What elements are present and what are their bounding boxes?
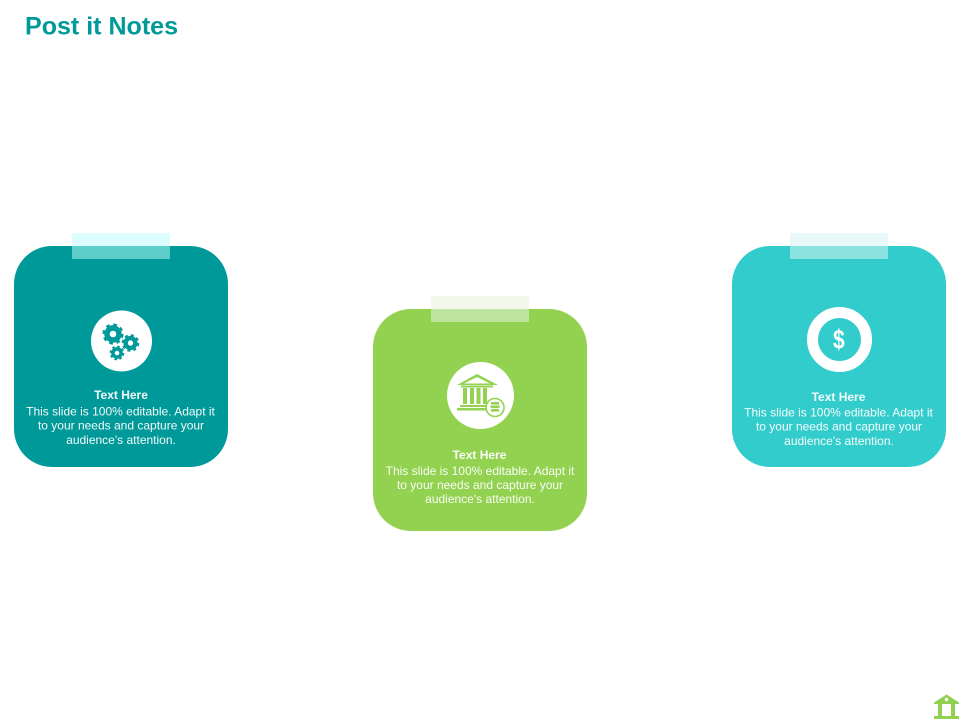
title: Post it Notes [25, 12, 178, 40]
text block 1: This slide is 100% editable. Adapt it [26, 404, 216, 418]
text block 3: Text Here [812, 390, 866, 404]
text block 2: audience's attention. [425, 492, 535, 506]
text block 2: This slide is 100% editable. Adapt it [386, 464, 575, 478]
text block 2: Text Here [453, 448, 507, 462]
text block 1 [26, 388, 216, 447]
tape 2 [431, 296, 529, 322]
note body 3 [732, 246, 946, 467]
note body 1 [14, 246, 228, 467]
text block 3: This slide is 100% editable. Adapt it [744, 406, 934, 420]
text block 3: audience's attention. [784, 434, 894, 448]
text block 1: audience's attention. [66, 433, 176, 447]
tape 1 [72, 233, 170, 259]
text block 3: to your needs and capture your [756, 420, 922, 434]
text block 3 [744, 390, 934, 448]
text block 2: to your needs and capture your [397, 478, 563, 492]
text block 2 [386, 448, 575, 506]
tape 3 [790, 233, 888, 259]
note body 2 [373, 309, 587, 531]
icon: dollar coin [812, 312, 866, 366]
icon: home bank [934, 694, 959, 719]
panel: note 2 green [373, 296, 587, 531]
panel: note 3 turquoise [732, 233, 946, 467]
icon: bank with coin [447, 362, 514, 429]
text block 1: Text Here [94, 388, 148, 402]
panel: note 1 teal [14, 233, 228, 467]
icon: gears [91, 310, 152, 372]
icon: dollar coin: $ [833, 325, 845, 355]
text block 1: to your needs and capture your [38, 418, 204, 432]
